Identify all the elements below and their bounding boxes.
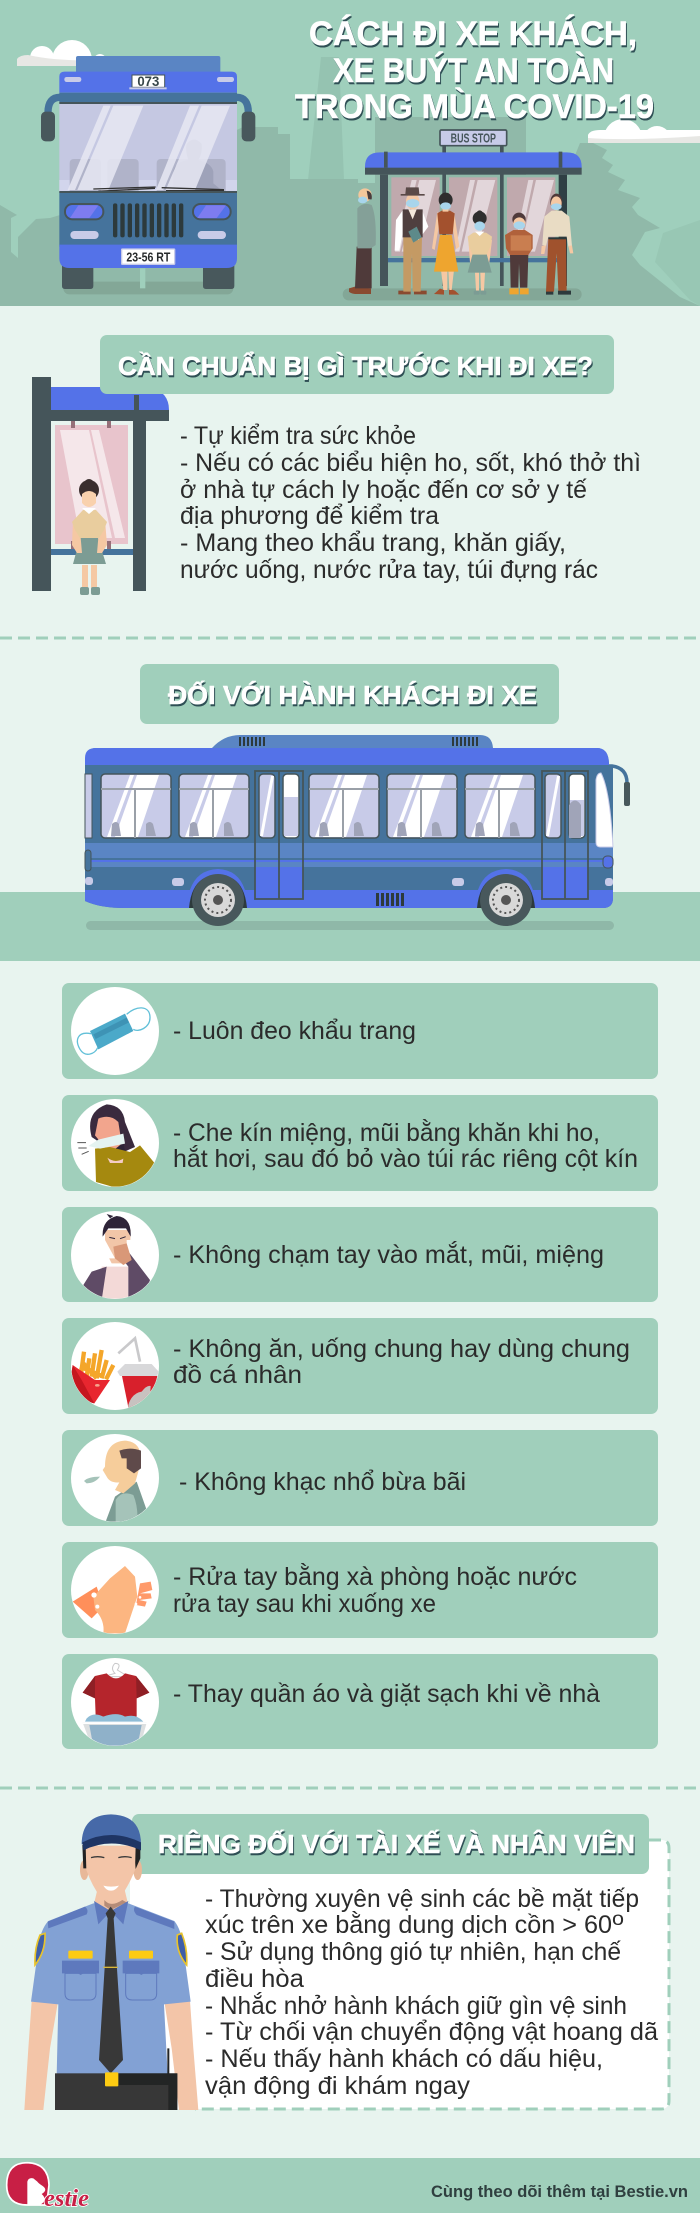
radio bbox=[118, 2048, 177, 2110]
section: preparation illustration shelter bbox=[32, 377, 169, 595]
preparation list bbox=[180, 422, 641, 584]
trousers bbox=[55, 2073, 177, 2110]
panel: wear mask: - Luôn đeo khẩu trang bbox=[173, 1017, 416, 1045]
road band bbox=[0, 892, 700, 961]
person: man with hat bbox=[395, 187, 428, 294]
sign posts bbox=[442, 146, 504, 286]
panel: no sharing: đồ cá nhân bbox=[173, 1361, 302, 1389]
wipers bbox=[93, 187, 224, 191]
top lights bbox=[64, 77, 81, 82]
eyes bbox=[91, 1857, 132, 1858]
left partial window bbox=[85, 774, 92, 838]
bus stop sign bbox=[440, 130, 507, 146]
panel: wash clothes: - Thay quần áo và giặt sạch khi về nhà bbox=[173, 1680, 600, 1708]
heading: drivers and staff bbox=[132, 1814, 649, 1874]
footer band bbox=[0, 2158, 700, 2213]
bus shadow bbox=[86, 921, 614, 930]
mirrors bbox=[41, 112, 55, 141]
title: TRONG MÙA COVID-19 bbox=[295, 88, 654, 126]
roof box bbox=[76, 56, 220, 76]
arms bbox=[24, 2001, 198, 2110]
icon: front view bus bbox=[41, 56, 255, 294]
roof bbox=[365, 152, 582, 168]
drivers list: o bbox=[612, 1909, 624, 1930]
heading: what to prepare: CẦN CHUẨN BỊ GÌ TRƯỚC KHI ĐI XE? bbox=[118, 351, 593, 381]
left cloud bbox=[17, 40, 104, 66]
bus stop sign: BUS STOP bbox=[451, 132, 496, 146]
title: XE BUÝT AN TOÀN bbox=[333, 52, 614, 90]
license plate: 23-56 RT bbox=[126, 251, 171, 265]
top blue bbox=[59, 72, 237, 93]
person: man with cream shirt bbox=[541, 194, 573, 295]
icon: washing hands bbox=[73, 1566, 152, 1633]
preparation list: - Mang theo khẩu trang, khăn giấy, bbox=[180, 529, 566, 557]
bench rail bbox=[51, 549, 133, 555]
seats bbox=[70, 159, 226, 192]
drivers list: - Nhắc nhở hành khách giữ gìn vệ sinh bbox=[205, 1991, 627, 2020]
heading: for passengers: ĐỐI VỚI HÀNH KHÁCH ĐI XE bbox=[168, 680, 537, 710]
route sign bbox=[129, 73, 167, 89]
ears bbox=[80, 1860, 89, 1880]
logo: Bestie: estie bbox=[44, 2185, 89, 2212]
right cloud bbox=[588, 119, 700, 143]
title bbox=[295, 15, 654, 126]
drivers list bbox=[205, 1885, 658, 2100]
panel: wear mask bbox=[62, 983, 658, 1079]
city skyline silhouette bbox=[0, 117, 700, 306]
ad panels bbox=[391, 177, 555, 256]
preparation list: ở nhà tự cách ly hoặc đến cơ sở y tế bbox=[180, 476, 587, 504]
drivers list: xúc trên xe bằng dung dịch cồn > 60 bbox=[205, 1910, 612, 1939]
windshield glare bbox=[68, 106, 230, 190]
windshield bbox=[59, 104, 237, 192]
body stripes bbox=[85, 843, 613, 867]
drivers list: - Sử dụng thông gió tự nhiên, hạn chế bbox=[205, 1938, 621, 1966]
panel: no spitting bbox=[62, 1430, 658, 1526]
panel: no touching face bbox=[62, 1207, 658, 1302]
title: CÁCH ĐI XE KHÁCH, bbox=[309, 15, 637, 53]
heading: for passengers bbox=[140, 664, 559, 724]
panel: no touching face: - Không chạm tay vào mắt, mũi, miệng bbox=[173, 1240, 604, 1269]
ground shadow bbox=[343, 288, 582, 300]
driver bbox=[173, 139, 223, 192]
drivers list: vận động đi khám ngay bbox=[205, 2072, 471, 2100]
heading: what to prepare bbox=[100, 335, 614, 394]
icon: mask bbox=[77, 1008, 150, 1054]
drivers list: điều hòa bbox=[205, 1965, 304, 1993]
mirror bbox=[608, 766, 627, 783]
person: girl bbox=[468, 210, 492, 295]
icon: uniformed driver bbox=[24, 1814, 198, 2110]
panel: drivers and staff content bbox=[130, 1840, 669, 2109]
background tower bbox=[308, 57, 344, 180]
icon: man spitting bbox=[84, 1441, 147, 1523]
panel: no sharing bbox=[62, 1318, 658, 1414]
poster panel bbox=[55, 425, 128, 544]
passenger windows bbox=[101, 774, 535, 838]
drivers list: - Từ chối vận chuyển động vật hoang dã bbox=[205, 2018, 658, 2046]
person: old man bbox=[349, 188, 376, 294]
side vent bbox=[376, 893, 404, 906]
door 2 bbox=[542, 771, 588, 899]
icon: coughing woman bbox=[77, 1104, 155, 1187]
lower front bbox=[59, 192, 237, 247]
logo: Bestie bbox=[7, 2163, 89, 2212]
icon: fries and drink bbox=[70, 1338, 159, 1407]
shirt bbox=[31, 1903, 191, 2075]
panel: wash hands bbox=[62, 1542, 658, 1638]
icon: shirt in wash basin bbox=[83, 1663, 149, 1747]
body bbox=[85, 748, 613, 908]
sleeve badges bbox=[35, 1933, 187, 1965]
panel: wash hands: rửa tay sau khi xuống xe bbox=[173, 1590, 436, 1618]
epaulets bbox=[48, 1907, 174, 1929]
buckle bbox=[105, 2072, 118, 2086]
bumper bbox=[59, 245, 237, 268]
shelter posts bbox=[32, 377, 51, 591]
bus shadow bbox=[63, 282, 233, 294]
panel: cover cough: - Che kín miệng, mũi bằng khăn khi ho, bbox=[173, 1118, 600, 1147]
tie bbox=[99, 1907, 123, 2073]
wheels bbox=[62, 263, 234, 289]
smile bbox=[103, 1886, 119, 1891]
drivers list: - Thường xuyên vệ sinh các bề mặt tiếp bbox=[205, 1885, 639, 1913]
person: woman in orange skirt bbox=[432, 193, 459, 295]
panel: cover cough bbox=[62, 1095, 658, 1191]
door 1 bbox=[255, 771, 303, 899]
route sign: 073 bbox=[137, 73, 160, 89]
bench rail bbox=[388, 258, 559, 262]
icon: side view bus bbox=[85, 735, 630, 930]
lower lights bbox=[70, 231, 99, 239]
panel: cover cough: hắt hơi, sau đó bỏ vào túi rác riêng cột kín bbox=[173, 1144, 638, 1173]
mirror arms bbox=[48, 97, 248, 113]
hair sides bbox=[82, 1845, 140, 1869]
footer text: Cùng theo dõi thêm tại Bestie.vn bbox=[431, 2182, 688, 2201]
roof unit bbox=[212, 735, 493, 748]
panel: no spitting: - Không khạc nhổ bừa bãi bbox=[179, 1468, 466, 1496]
preparation list: - Nếu có các biểu hiện ho, sốt, khó thở thì bbox=[180, 449, 641, 477]
columns bbox=[384, 152, 562, 168]
front wheel bbox=[475, 869, 536, 926]
drivers list: - Nếu thấy hành khách có dấu hiệu, bbox=[205, 2045, 603, 2073]
name tags bbox=[68, 1951, 93, 1959]
neck bbox=[94, 1888, 128, 1912]
roof vents bbox=[239, 737, 478, 746]
person: woman bbox=[72, 479, 107, 595]
grille bbox=[113, 203, 183, 237]
preparation list: - Tự kiểm tra sức khỏe bbox=[180, 422, 416, 450]
collar bbox=[94, 1901, 128, 1924]
rear wheel bbox=[187, 869, 248, 926]
right hump silhouette bbox=[655, 220, 700, 306]
face bbox=[86, 1846, 136, 1900]
pockets bbox=[65, 1973, 157, 2000]
panel: wash clothes bbox=[62, 1654, 658, 1749]
panel: wash hands: - Rửa tay bằng xà phòng hoặc nước bbox=[173, 1562, 577, 1591]
header panel bbox=[0, 0, 700, 306]
heading: drivers and staff: RIÊNG ĐỐI VỚI TÀI XẾ VÀ NHÂN VIÊN bbox=[158, 1829, 635, 1859]
person: boy with box bbox=[505, 213, 533, 294]
front windshield bbox=[596, 773, 613, 847]
preparation list: địa phương để kiểm tra bbox=[180, 502, 439, 530]
skirt bbox=[85, 890, 613, 908]
panel: no sharing: - Không ăn, uống chung hay dùng chung bbox=[173, 1335, 630, 1363]
cap bbox=[82, 1814, 141, 1844]
preparation list: nước uống, nước rửa tay, túi đựng rác bbox=[180, 556, 598, 584]
headlights bbox=[65, 204, 103, 219]
shelter roof bbox=[51, 387, 169, 410]
icon: bus stop with passengers bbox=[343, 130, 582, 300]
indicators and lights bbox=[85, 877, 613, 886]
icon: man touching face bbox=[83, 1214, 150, 1300]
